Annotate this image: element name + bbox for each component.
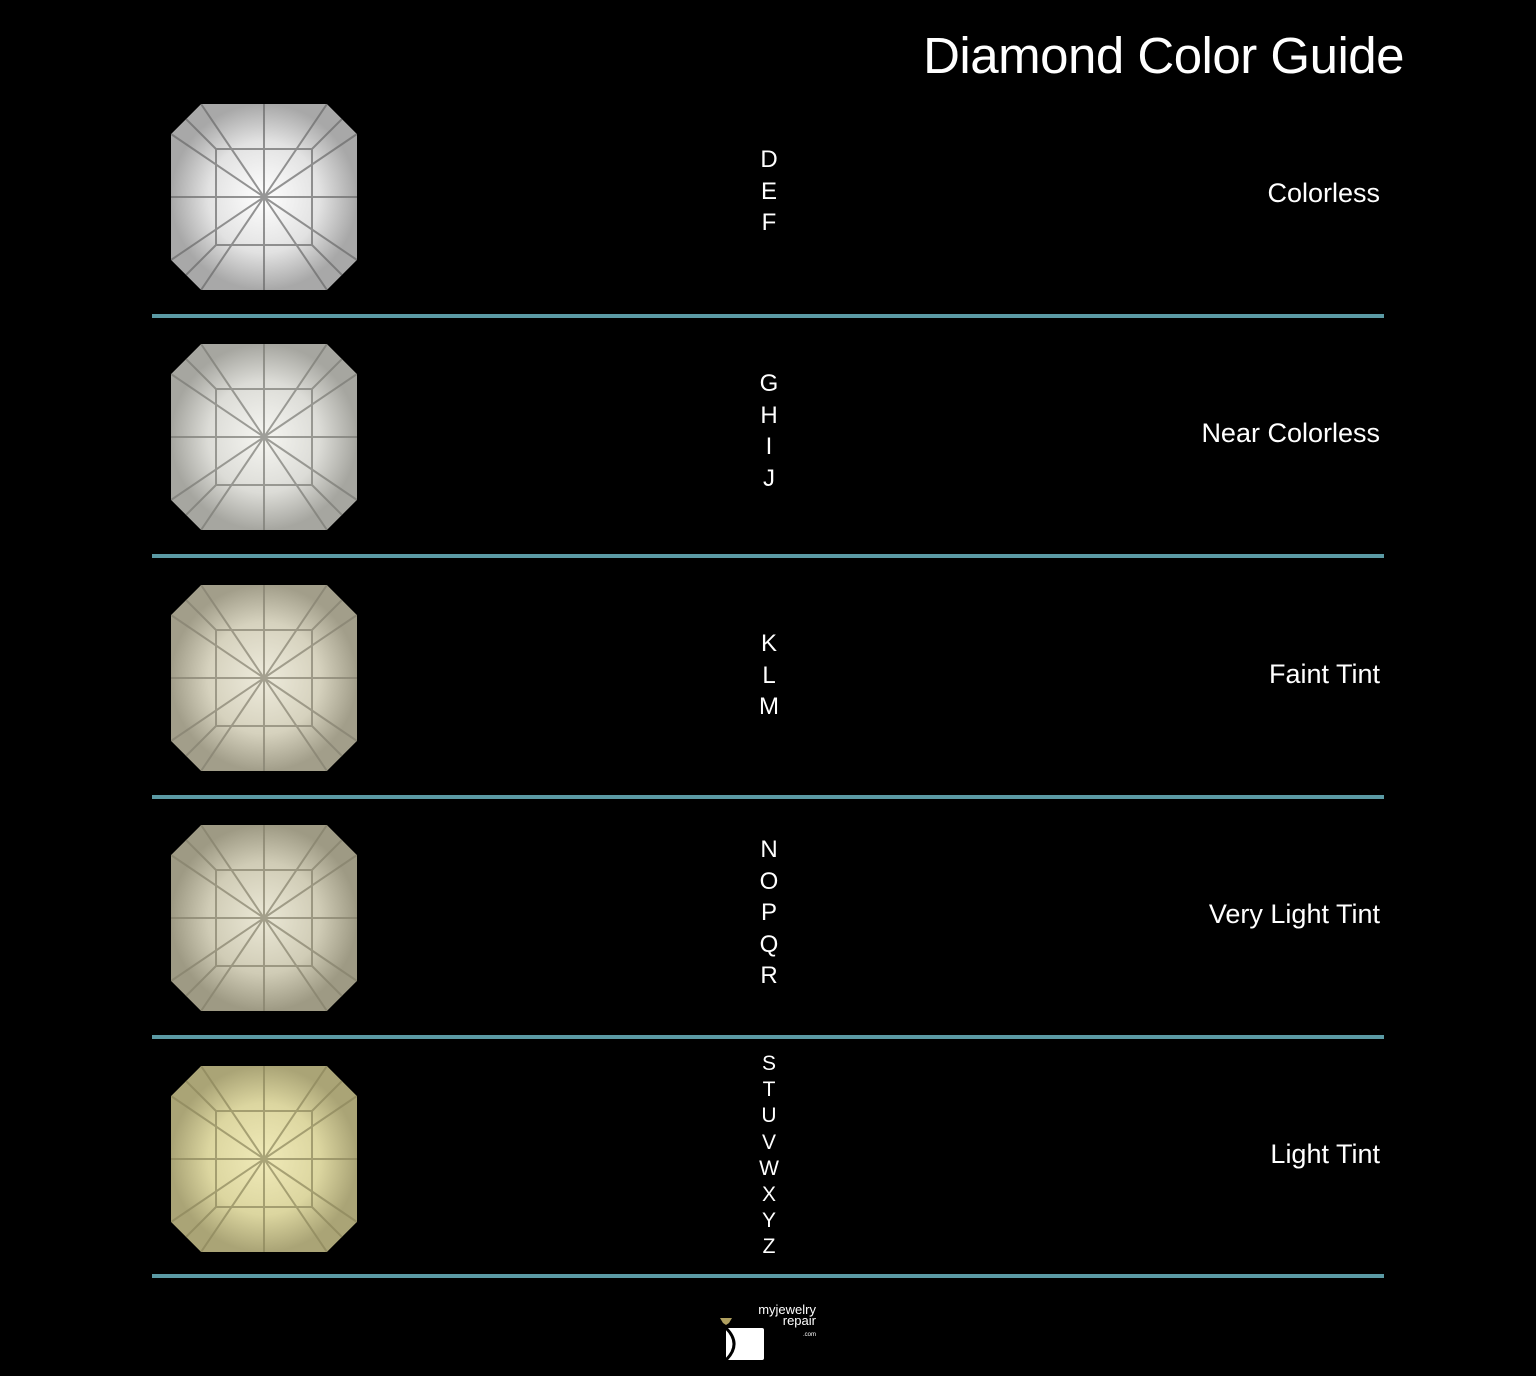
label: Very Light Tint: Very Light Tint (1209, 899, 1380, 929)
logo text (758, 1302, 816, 1338)
logo (720, 1302, 816, 1360)
grades: S-Z (759, 1052, 779, 1258)
title: Diamond Color Guide (923, 27, 1404, 84)
grades: K L M: L (762, 662, 776, 688)
icon: logo mark (720, 1318, 764, 1360)
diamond: K-M (171, 585, 357, 771)
diamond: G-J (171, 344, 357, 530)
grades: D E F: D (760, 146, 778, 173)
grades: N O P Q R: N (760, 836, 778, 863)
grades: S-Z: V (762, 1131, 776, 1154)
grades: S-Z: Y (762, 1209, 776, 1232)
grades: K L M: M (759, 693, 779, 720)
label: Near Colorless: Near Colorless (1201, 418, 1380, 448)
grades: N O P Q R (760, 836, 778, 989)
grades: G H I J: G (760, 370, 778, 397)
grades: G H I J: H (760, 402, 778, 428)
grades: S-Z: X (762, 1183, 776, 1206)
grades: N O P Q R: R (760, 962, 778, 989)
label: Faint Tint: Faint Tint (1269, 659, 1380, 689)
grades: K L M: K (761, 630, 777, 657)
grades: G H I J: I (766, 433, 772, 460)
label: Light Tint: Light Tint (1270, 1139, 1380, 1169)
grades: N O P Q R: P (761, 899, 777, 926)
diamond: N-R (171, 825, 357, 1011)
grades: D E F (760, 146, 778, 236)
logo text: .com (803, 1332, 816, 1338)
grades: G H I J (760, 370, 778, 492)
diamond: D-F (171, 104, 357, 290)
grades: S-Z: Z (763, 1235, 775, 1258)
logo text: repair (783, 1313, 816, 1328)
grades: S-Z: T (763, 1078, 775, 1101)
label: Colorless: Colorless (1267, 178, 1380, 208)
logo text: myjewelry (758, 1302, 816, 1317)
grades: N O P Q R: O (760, 868, 778, 894)
grades: G H I J: J (763, 464, 775, 492)
grades: N O P Q R: Q (760, 930, 778, 958)
grades: D E F: E (761, 178, 777, 204)
diamond: S-Z (171, 1066, 357, 1252)
grades: K L M (759, 630, 779, 720)
grades: S-Z: W (759, 1157, 779, 1180)
grades: D E F: F (762, 209, 776, 236)
grades: S-Z: U (761, 1104, 777, 1127)
grades: S-Z: S (762, 1052, 776, 1075)
